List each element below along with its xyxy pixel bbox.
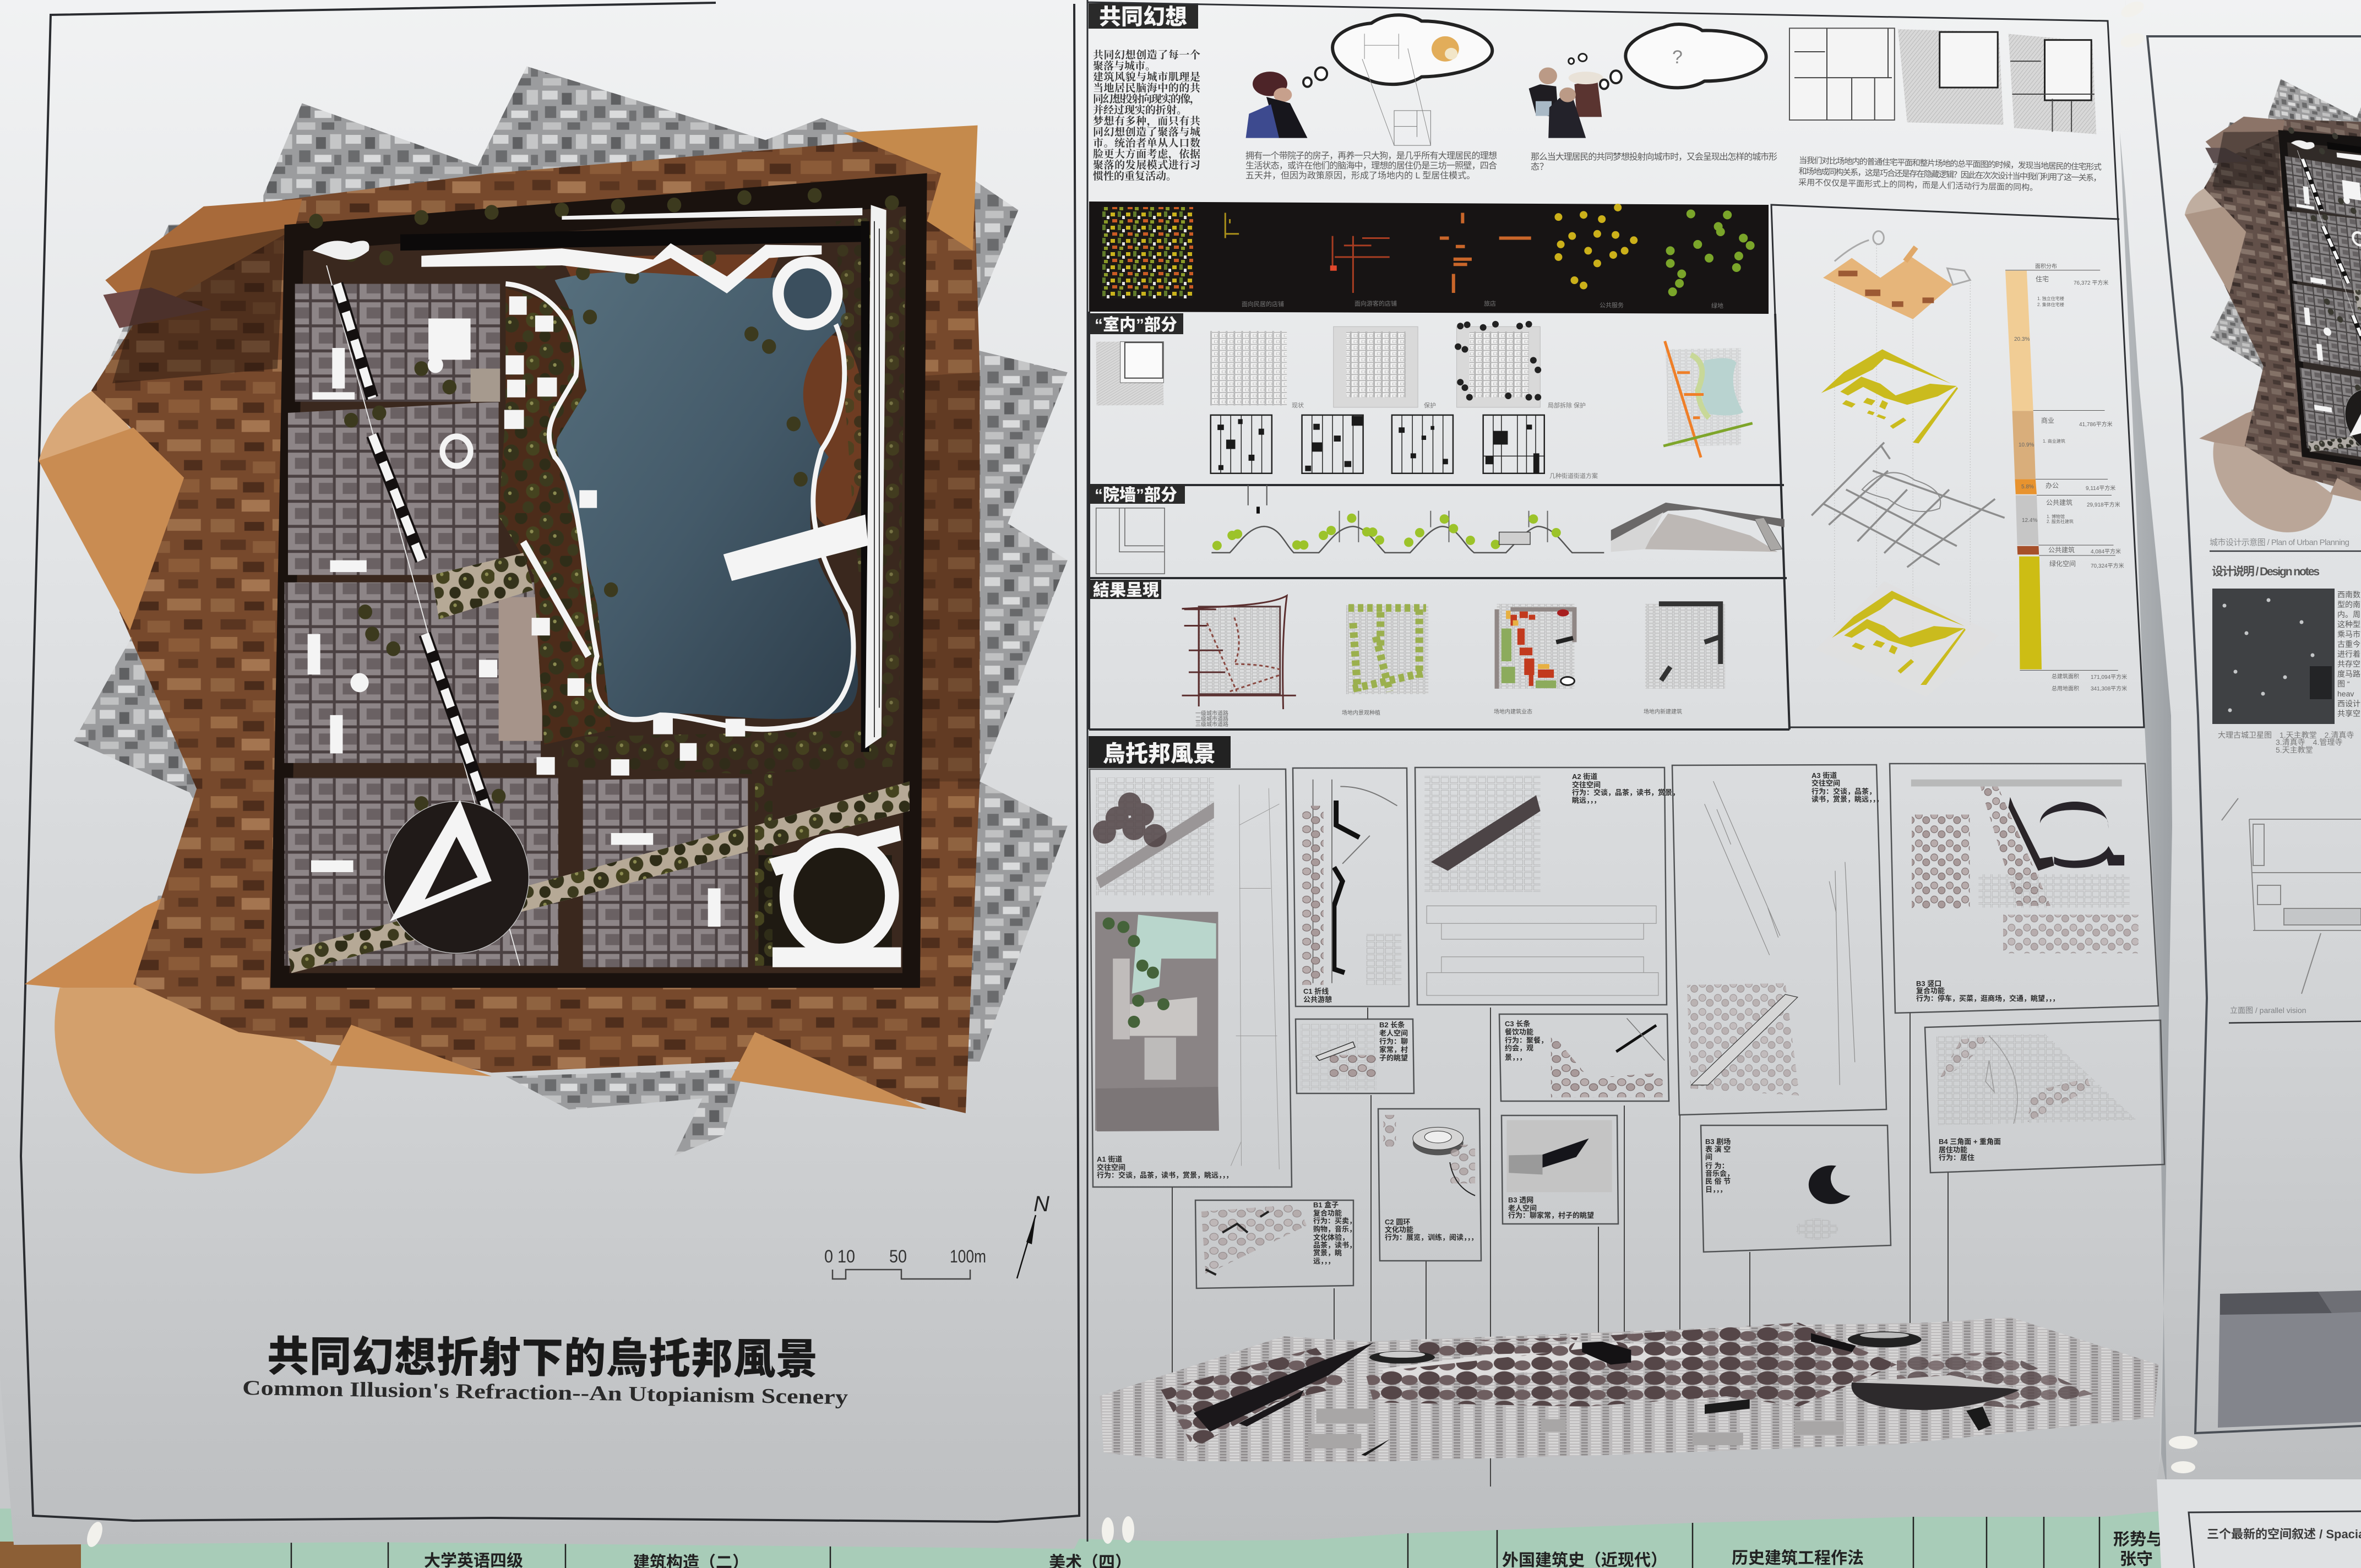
bar chart labels: 4,084平方米 (2091, 548, 2121, 555)
caption B3 vertical opening (1916, 979, 2059, 1003)
caption B2: B2 长条 (1379, 1021, 1405, 1029)
bar chart labels: 5.8% (2021, 484, 2034, 490)
satellite photograph of Dali (2212, 589, 2335, 724)
white zigzag promenade (308, 205, 886, 927)
caption C3: C3 长条 (1505, 1020, 1530, 1028)
bar chart labels: 171,094平方米 (2091, 673, 2127, 680)
bar chart labels: 办公 (2046, 481, 2059, 489)
bar chart labels: 76,372 平方米 (2074, 279, 2108, 286)
caption B3 theatre: 间 (1705, 1153, 1712, 1161)
caption B3 vertical opening: 行为：停车，买菜，逛商场，交通，眺望，，， (1916, 994, 2059, 1003)
text: courtyard dream caption: 拥有一个带院子的房子，再养一只大狗，是几乎所有大理居民的理想 (1245, 151, 1497, 161)
caption B1: 远，，， (1313, 1257, 1335, 1265)
caption C3: 行为：聚餐， (1505, 1036, 1548, 1044)
text: isomorphism note: 采用不仅仅是平面形式上的同构，而是人们活动行为层面的同构。 (1798, 178, 2038, 193)
bar chart labels: 2. 服务社建筑 (2047, 519, 2074, 524)
text: shared illusion intro: 建筑风貌与城市肌理是 (1093, 71, 1200, 83)
satellite caption: 3.清真寺 4.管理寺 (2276, 738, 2342, 747)
result plan labels (1195, 708, 1682, 728)
courtyard wall perspective (1611, 503, 1785, 552)
caption B1 (1313, 1201, 1356, 1265)
courtyard wall section diagram (1096, 485, 1604, 574)
bar chart labels (2014, 263, 2127, 692)
satellite caption: 5.天主教堂 (2276, 745, 2313, 754)
elevation line drawing (2222, 798, 2361, 994)
right poster body text: 内。周 (2337, 610, 2360, 619)
bar chart labels: 商业 (2041, 416, 2054, 424)
C3 long strip drawing (1551, 1019, 1664, 1097)
title (242, 1333, 848, 1409)
caption B3 vertical opening: B3 竖口 (1916, 979, 1941, 988)
scale bar (824, 1246, 986, 1279)
title: Common Illusion's Refraction--An Utopianism Scenery (242, 1376, 848, 1409)
caption B1: 购物，音乐， (1313, 1225, 1356, 1233)
scale bar: 0 10 (824, 1246, 855, 1266)
B3 theatre drawing (1796, 1166, 1850, 1239)
bar chart labels: 9,114平方米 (2086, 484, 2115, 492)
stacked area bar chart (2005, 270, 2118, 671)
four result plans (1182, 596, 1725, 709)
A3 street drawing (1687, 781, 1855, 1096)
bar chart labels: 29,918平方米 (2087, 501, 2120, 508)
caption B3 theatre: 音乐会， (1705, 1169, 1734, 1178)
bar chart labels: 70,324平方米 (2091, 562, 2124, 569)
caption A2: 眺远，，， (1572, 796, 1601, 804)
result plan labels: 场地内建筑业态 (1494, 708, 1532, 715)
icon: villager woman with thought cloud (1246, 15, 1492, 145)
dark perspective image (2218, 1291, 2361, 1428)
caption B1: 赏景，眺 (1313, 1249, 1342, 1257)
caption B3 wind-through: 行为：聊家常，村子的眺望 (1508, 1211, 1594, 1219)
C2 ring drawing (1383, 1115, 1475, 1196)
caption B4: B4 三角面 + 重角面 (1939, 1137, 2001, 1146)
caption A3: A3 街道 (1811, 771, 1837, 780)
text: projection question: 态？ (1531, 162, 1548, 172)
panel: section heading courtyard wall: “院墙”部分 (1095, 486, 1177, 504)
right poster caption and notes: 设计说明 / Design notes (2212, 565, 2320, 578)
bar chart labels: 总建筑面积 (2052, 673, 2079, 680)
caption B1: 文化体验， (1313, 1233, 1349, 1242)
text: projection question (1531, 152, 1777, 172)
master plan (25, 67, 1068, 1174)
caption A3: 行为：交谈，品茶， (1811, 787, 1876, 796)
caption A1: A1 街道 (1097, 1155, 1122, 1163)
result plan labels: 场地内新建建筑 (1644, 708, 1682, 715)
right poster body text: 图 “ (2337, 679, 2350, 688)
right poster body text (2337, 590, 2360, 718)
bar chart labels: 住宅 (2036, 275, 2049, 283)
bar chart labels: 1. 博物馆 (2047, 514, 2065, 519)
parallel vision label (2229, 1006, 2361, 1023)
caption B2: 子的眺望 (1379, 1054, 1408, 1062)
caption B3 wind-through (1508, 1196, 1594, 1219)
indoor labels: 保护 (1424, 401, 1436, 409)
bar chart labels: 绿化空间 (2049, 559, 2076, 568)
text: shared illusion intro: 当地居民脑海中的的共 (1093, 82, 1201, 94)
caption C2: 行为：展览，训练，阅读，，， (1385, 1233, 1478, 1242)
panel: section heading utopia landscape (1089, 736, 1231, 768)
right poster body text: 乘马市 (2337, 630, 2360, 639)
text: shared illusion intro: 同幻想创造了聚落与城 (1093, 126, 1200, 138)
result plan labels: 一级城市道路 (1195, 710, 1228, 717)
caption B4 (1939, 1137, 2001, 1162)
caption B3 theatre: 表 演 空 (1705, 1145, 1731, 1153)
black promenade bars (400, 208, 869, 752)
text: courtyard dream caption (1245, 151, 1497, 181)
caption A2: 交往空间 (1572, 781, 1601, 789)
top right house sketches (1789, 28, 2096, 134)
result plan labels: 场地内景观种植 (1342, 709, 1380, 716)
panel: right poster frame (2147, 36, 2361, 1433)
green timetable on the wall: 历史建筑工程作法 (1732, 1549, 1864, 1567)
caption A3: 读书，赏景，眺远，，， (1811, 795, 1883, 803)
caption B3 theatre (1705, 1137, 1734, 1194)
bar chart labels: 总用地面积 (2052, 685, 2079, 692)
bar chart labels: 公共建筑 (2048, 546, 2075, 554)
panel: black layer maps band: 面向民居的店铺 (1242, 300, 1284, 308)
bar chart labels: 20.3% (2014, 336, 2030, 342)
caption C3: 约会，观 (1505, 1044, 1533, 1052)
B3 wind-through drawing (1506, 1120, 1612, 1192)
right poster body text: 西南数 (2337, 590, 2360, 599)
B3 vertical opening drawing (1911, 780, 2139, 954)
caption B3 theatre: 日，，， (1705, 1185, 1727, 1194)
panel: black layer maps band: 绿地 (1711, 302, 1723, 309)
text: shared illusion intro (1093, 48, 1201, 182)
bar chart labels: 1. 商业建筑 (2043, 438, 2065, 444)
bar chart labels: 12.4% (2022, 518, 2037, 524)
right poster body text: 型的南 (2337, 600, 2360, 609)
satellite caption: 大理古城卫星图 1.天主教堂 2.清真寺 (2218, 731, 2354, 739)
scale bar: 100m (950, 1246, 986, 1266)
caption B4: 行为：居住 (1939, 1153, 1974, 1162)
caption A2: A2 街道 (1572, 772, 1597, 781)
shadow fold between posters (2120, 132, 2172, 1487)
indoor labels: 几种街道街道方案 (1549, 472, 1598, 480)
right poster body text: 西设计 (2337, 699, 2360, 708)
text: shared illusion intro: 梦想有多种，而只有共 (1093, 115, 1201, 127)
mini master plan on right poster (2163, 45, 2361, 590)
caption C3: 餐饮功能 (1505, 1028, 1533, 1036)
icon: three villagers with question cloud (1529, 24, 1766, 138)
right poster caption and notes: 城市设计示意图 / Plan of Urban Planning (2210, 537, 2349, 547)
text: shared illusion intro: 聚落的发展模式进行习 (1093, 159, 1200, 171)
scale bar: 50 (889, 1246, 907, 1266)
text: shared illusion intro: 聚落与城市。 (1093, 60, 1156, 72)
text: shared illusion intro: 惯性的重复活动。 (1093, 170, 1177, 182)
caption B4: 居住功能 (1939, 1146, 1967, 1154)
caption A3 (1811, 771, 1883, 803)
bar chart labels: 10.9% (2019, 442, 2034, 448)
right poster body text: 共享空 (2337, 709, 2360, 718)
caption B3 theatre: 民 俗 节 (1705, 1177, 1731, 1185)
caption A2: 行为：交谈，品茶，读书，赏景， (1572, 788, 1679, 797)
caption B2: 家常，村 (1379, 1046, 1408, 1054)
caption C2: 文化功能 (1385, 1226, 1413, 1234)
caption C1: C1 折线 (1303, 987, 1329, 995)
omega plaza (769, 826, 901, 967)
text: shared illusion intro: 市。统治者单从人口数 (1093, 137, 1200, 149)
text: isomorphism note: 和场地成同构关系，这是巧合还是存在隐藏逻辑？因此在次次设计当中我们利用了这一关系， (1798, 167, 2102, 183)
caption B3 theatre: B3 剧场 (1705, 1137, 1731, 1146)
text: shared illusion intro: 共同幻想创造了每一个 (1093, 48, 1200, 61)
north arrow: N (1033, 1192, 1049, 1216)
caption A1: 交往空间 (1097, 1163, 1125, 1172)
indoor labels: 局部拆除 保护 (1548, 401, 1586, 409)
indoor labels: 现状 (1292, 401, 1304, 409)
right poster body text: 古重今 (2337, 640, 2360, 649)
pedestrian axis map (1663, 341, 1753, 458)
A2 street drawing (1424, 776, 1658, 995)
bird's-eye site model (1100, 1317, 2158, 1462)
A1 street drawings (1095, 778, 1279, 1169)
parallel vision label: 立面图 / parallel vision (2230, 1006, 2306, 1015)
triangle court (384, 800, 529, 953)
bar chart labels: 1. 独立住宅楼 (2037, 296, 2064, 301)
indoor diagrams (1096, 324, 1540, 407)
green timetable on the wall (0, 1509, 2361, 1568)
panel frame: indoor and courtyard wall sections (1089, 312, 1789, 729)
four alley option diagrams (1211, 415, 1544, 473)
diagonal street (327, 265, 520, 966)
caption C2: C2 圆环 (1385, 1218, 1410, 1226)
C1 polyline drawing (1302, 780, 1401, 985)
right poster body text: 度马路 (2337, 669, 2360, 678)
question mark in cloud: ? (1672, 47, 1683, 68)
right poster body text: 这种型 (2337, 620, 2360, 629)
caption B3 vertical opening: 复合功能 (1916, 987, 1945, 995)
caption A2 (1572, 772, 1679, 804)
result plan labels: 二级城市道路 (1195, 715, 1228, 722)
right poster body text: 共存空 (2337, 660, 2360, 668)
tree belts (288, 195, 910, 973)
text: isomorphism note: 当我们对比场地内的普通住宅平面和整片场地的总平面图的时候，发现当地居民的住宅形式 (1799, 156, 2102, 172)
lake with rust banks (555, 254, 866, 719)
panel: shared illusion header: 共同幻想 (1099, 5, 1187, 29)
caption C1: 公共游憩 (1303, 995, 1332, 1004)
green timetable on the wall: 形势与 (2113, 1531, 2163, 1549)
right poster caption and notes (2210, 537, 2361, 578)
panel: left poster frame (21, 3, 1079, 1522)
caption C2 (1385, 1218, 1478, 1242)
bar chart labels: 41,786平方米 (2079, 421, 2113, 428)
text: courtyard dream caption: 生活状态，或许在他们的脑海中，理想的居住仍是三坊一照壁，四合 (1245, 160, 1497, 171)
text: courtyard dream caption: 五天井，但因为政策原因，形成了场地内的 L 型居住模式。 (1245, 171, 1475, 181)
caption A1: 行为：交谈，品茶，读书，赏景，眺远，，， (1097, 1171, 1233, 1179)
caption B1: 品茶，读书， (1313, 1241, 1356, 1249)
title: 共同幻想折射下的烏托邦風景 (267, 1333, 818, 1383)
boxes of utopia landscape with connectors (1090, 764, 2164, 1487)
caption B3 wind-through: 老人空间 (1508, 1204, 1537, 1212)
residential blocks (285, 284, 748, 967)
text: projection question: 那么当大理居民的共同梦想投射向城市时，又会呈现出怎样的城市形 (1531, 152, 1777, 162)
caption A3: 交往空间 (1811, 779, 1840, 787)
panel: section heading results: 結果呈現 (1093, 581, 1159, 600)
text: isomorphism note (1798, 156, 2102, 194)
panel: section heading utopia landscape: 烏托邦風景 (1103, 741, 1216, 766)
satellite caption (2218, 731, 2354, 754)
panel: black layer maps band: 旅店 (1484, 300, 1496, 307)
right poster paper (2125, 0, 2361, 1481)
result plan labels: 三级城市道路 (1195, 721, 1228, 728)
B2 long strip drawing (1301, 1023, 1376, 1090)
caption B1: 行为：买卖， (1313, 1217, 1356, 1225)
panel: black layer maps band: 公共服务 (1600, 302, 1624, 309)
text: shared illusion intro: 脸更大方面考虑，依据 (1093, 148, 1200, 160)
bar chart labels: 341,308平方米 (2091, 685, 2127, 692)
caption A1 (1097, 1155, 1233, 1179)
B1 box drawing (1201, 1205, 1307, 1275)
right poster body text: 进行着 (2337, 650, 2360, 658)
caption B2 (1379, 1021, 1408, 1062)
bar chart labels: 公共建筑 (2046, 498, 2072, 507)
bar chart labels: 2. 集体住宅楼 (2037, 302, 2064, 307)
caption B2: 行为：聊 (1379, 1037, 1408, 1046)
caption B2: 老人空间 (1379, 1029, 1408, 1037)
axonometric layers diagram (1811, 231, 2005, 696)
panel: black layer maps band: 面向游客的店铺 (1354, 300, 1397, 307)
caption C3: 景，，， (1505, 1053, 1526, 1061)
caption B3 wind-through: B3 透网 (1508, 1196, 1533, 1204)
caption B3 theatre: 行 为： (1705, 1162, 1729, 1170)
lower right poster sheet (2157, 1479, 2361, 1568)
B4 triangle drawing (1936, 1034, 2136, 1125)
caption C3 (1505, 1020, 1548, 1061)
text: shared illusion intro: 同幻想投射向现实的像， (1093, 92, 1200, 105)
indoor labels (1292, 401, 1598, 480)
caption C1 (1303, 987, 1332, 1004)
caption B1: 复合功能 (1313, 1209, 1342, 1217)
text: shared illusion intro: 并经过现实的折射。 (1093, 104, 1187, 116)
panel: black layer maps band (1089, 202, 1769, 314)
middle poster frame (1087, 0, 2144, 1542)
north arrow (1017, 1192, 1049, 1278)
panel: section heading indoor: “室内”部分 (1095, 315, 1177, 334)
bar chart labels: 面积分布 (2035, 263, 2057, 270)
caption B1: B1 盒子 (1313, 1201, 1339, 1209)
right poster body text: heav (2337, 689, 2354, 698)
